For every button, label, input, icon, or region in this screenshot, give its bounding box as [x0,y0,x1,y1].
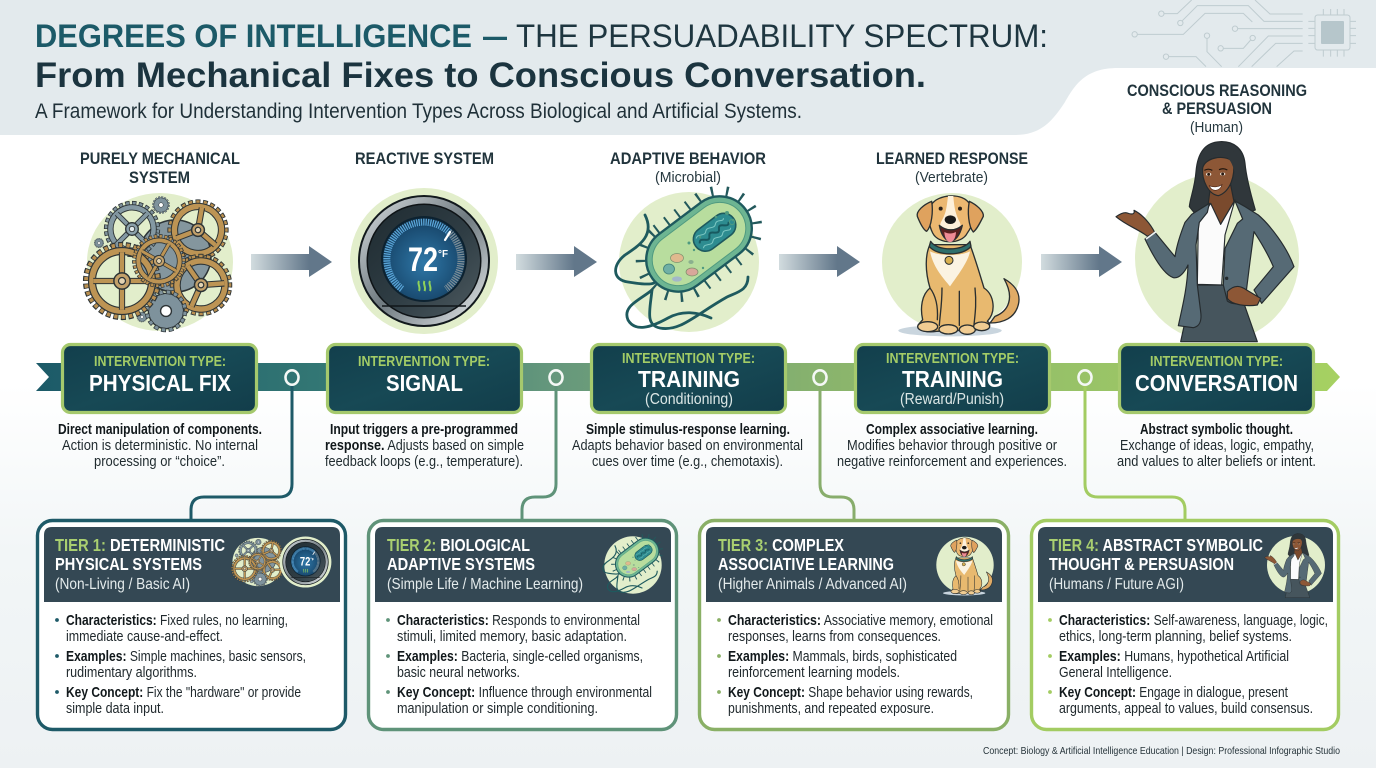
tier 4 header: TIER 4: ABSTRACT SYMBOLIC [1049,535,1263,555]
tier 2 bullets: Examples: Bacteria, single-celled organisms, [397,648,643,665]
tier 1 bullets [55,612,306,717]
tier 1 header: TIER 1: DETERMINISTIC [55,535,225,555]
connector: tier 2 [522,370,562,520]
tier 3 header [706,527,1002,602]
intervention box: training conditioning [592,344,786,412]
description: signal [325,421,524,470]
tier 3 bullets: punishments, and repeated exposure. [728,700,934,717]
intervention box: training reward: INTERVENTION TYPE: [886,351,1019,367]
tier 1 bullets: Characteristics: Fixed rules, no learning, [66,612,288,629]
tier 2 header [375,527,671,602]
heading: conscious reasoning and persuasion: (Human) [1190,119,1243,136]
description: training reward: Complex associative learning. [866,421,1038,438]
intervention box: training reward [856,344,1050,412]
tier 4 bullets: Characteristics: Self-awareness, language, logic, [1059,612,1328,629]
description: conversation: Exchange of ideas, logic, empathy, [1120,437,1314,454]
tier 1 bullets: immediate cause-and-effect. [66,628,223,645]
tier 2 bullets: manipulation or simple conditioning. [397,700,598,717]
arrow [251,246,332,277]
intervention box: physical fix [62,344,256,412]
intervention box: training reward: (Reward/Punish) [900,391,1004,408]
description: training conditioning [572,421,803,470]
intervention box: physical fix: INTERVENTION TYPE: [94,354,226,370]
tier 2 bullets [386,612,652,717]
tier 4 header [1038,527,1333,602]
panel: tier 2 [368,520,676,730]
heading: learned response: (Vertebrate) [915,169,988,186]
intervention box: signal: SIGNAL [386,370,463,396]
header band [0,0,1376,135]
jacket viewer-left sleeve and panel [1145,203,1209,328]
heading: adaptive behavior: (Microbial) [655,169,721,186]
tier 4 bullets: ethics, long-term planning, belief systems. [1059,628,1292,645]
tier 2 header: (Simple Life / Machine Learning) [387,576,583,593]
blouse [1197,200,1235,285]
description: training conditioning: Simple stimulus-response learning. [586,421,790,438]
subtitle: A Framework for Understanding Intervention Types Across Biological and Artificial Systems. [35,100,802,123]
tier 4 bullets: Examples: Humans, hypothetical Artificial [1059,648,1289,665]
tier 3 bullets: responses, learns from consequences. [728,628,941,645]
title [35,18,1048,95]
tier 2 bullets: Characteristics: Responds to environmental [397,612,640,629]
tier 3 bullets: reinforcement learning models. [728,664,900,681]
description: physical fix: Action is deterministic. No internal [62,437,258,454]
tier 2 header: TIER 2: BIOLOGICAL [387,535,530,555]
description: training conditioning: cues over time (e.g., chemotaxis). [592,453,783,470]
heading: learned response: LEARNED RESPONSE [876,149,1028,168]
intervention box: training conditioning: TRAINING [638,366,740,392]
arrow [779,246,860,277]
connector: tier 1 [191,370,298,520]
timeline ribbon [36,363,1340,391]
jacket viewer-right sleeve and panel [1223,201,1294,304]
title: From Mechanical Fixes to Conscious Conversation. [35,56,926,95]
panel: tier 1 [38,520,346,730]
tier 1 bullets: Examples: Simple machines, basic sensors, [66,648,306,665]
decorative circuit and chip icon [1132,0,1356,67]
tier 2 bullets: Key Concept: Influence through environmental [397,684,652,701]
tier 2 thumbnail: bacterium [603,533,664,594]
tier 3 thumbnail: dog [936,537,994,595]
icon: woman presenter [1116,142,1294,342]
description: physical fix: Direct manipulation of components. [58,421,262,438]
tier 4 header: THOUGHT & PERSUASION [1049,554,1234,574]
heading: purely mechanical system: PURELY MECHANICAL [80,149,240,168]
connector: tier 4 [1078,370,1185,520]
tier 2 bullets: stimuli, limited memory, basic adaptation. [397,628,627,645]
description: training reward: Modifies behavior through positive or [847,437,1057,454]
description: conversation: Abstract symbolic thought. [1140,421,1293,438]
panel: tier 3 [700,520,1008,730]
intervention box: conversation: INTERVENTION TYPE: [1150,354,1283,370]
tier 1 thumbnail: gears and thermostat [232,536,331,588]
tier 1 bullets: simple data input. [66,700,164,717]
tier 2 header: ADAPTIVE SYSTEMS [387,554,535,574]
description: signal: feedback loops (e.g., temperature). [325,453,523,470]
description: training conditioning: Adapts behavior based on environmental [572,437,803,454]
tier 3 header: ASSOCIATIVE LEARNING [718,554,894,574]
description: physical fix: processing or “choice”. [94,453,225,470]
intervention box: signal [328,344,522,412]
title: THE PERSUADABILITY SPECTRUM: [516,18,1048,54]
tier 4 bullets: arguments, appeal to values, build consensus. [1059,700,1313,717]
tier 4 bullets: General Intelligence. [1059,664,1172,681]
tier 3 bullets [717,612,993,717]
title: DEGREES OF INTELLIGENCE [35,18,472,54]
tier 4 header: (Humans / Future AGI) [1049,576,1184,593]
skirt [1181,285,1257,342]
arrow [1041,246,1122,277]
heading: purely mechanical system [80,149,240,187]
icon: thermostat: 72 [408,241,438,279]
tier 1 header: (Non-Living / Basic AI) [55,576,190,593]
tier 4 bullets [1048,612,1328,717]
icon: bacterium [616,184,765,332]
heading: adaptive behavior: ADAPTIVE BEHAVIOR [610,149,766,168]
intervention box: training conditioning: INTERVENTION TYPE: [622,351,755,367]
tier 1 header: PHYSICAL SYSTEMS [55,554,202,574]
tier 2 bullets: basic neural networks. [397,664,520,681]
icon: gears [87,193,240,331]
heading: conscious reasoning and persuasion: & PERSUASION [1162,99,1272,118]
intervention box: conversation [1120,344,1314,412]
description: training reward: negative reinforcement and experiences. [837,453,1067,470]
tier 4 thumbnail: woman [1265,534,1325,598]
tier 3 header: (Higher Animals / Advanced AI) [718,576,907,593]
heading: conscious reasoning and persuasion [1127,81,1307,136]
intervention box: conversation: CONVERSATION [1135,370,1298,396]
heading: conscious reasoning and persuasion: CONSCIOUS REASONING [1127,81,1307,100]
description: conversation: and values to alter beliefs or intent. [1117,453,1316,470]
tier 4 bullets: Key Concept: Engage in dialogue, present [1059,684,1289,701]
tier 3 header: TIER 3: COMPLEX [718,535,844,555]
title: — [483,18,507,54]
intervention box: training reward: TRAINING [902,366,1003,392]
heading: adaptive behavior [610,149,766,186]
panel: tier 4 [1032,520,1338,730]
intervention box: physical fix: PHYSICAL FIX [89,370,232,396]
icon: thermostat [350,188,498,334]
connector: tier 3 [814,370,854,520]
tier 1 bullets: Key Concept: Fix the "hardware" or provide [66,684,301,701]
tier 1 header [44,527,340,602]
description: physical fix [58,421,262,470]
description: signal: response. Adjusts based on simple [325,437,524,454]
heading: learned response [876,149,1028,186]
tier 3 bullets: Examples: Mammals, birds, sophisticated [728,648,957,665]
tier 3 bullets: Key Concept: Shape behavior using rewards, [728,684,973,701]
intervention box: signal: INTERVENTION TYPE: [358,354,490,370]
heading: reactive system: REACTIVE SYSTEM [355,149,494,168]
description: training reward [837,421,1067,470]
intervention box: training conditioning: (Conditioning) [645,391,733,408]
icon: thermostat: °F [438,249,448,260]
icon: golden retriever [882,193,1022,336]
heading: purely mechanical system: SYSTEM [129,168,190,187]
background circle: human [1135,174,1299,342]
tier 3 bullets: Characteristics: Associative memory, emotional [728,612,993,629]
description: signal: Input triggers a pre-programmed [330,421,518,438]
arrow [516,246,597,277]
description: conversation [1117,421,1316,470]
tier 1 bullets: rudimentary algorithms. [66,664,197,681]
